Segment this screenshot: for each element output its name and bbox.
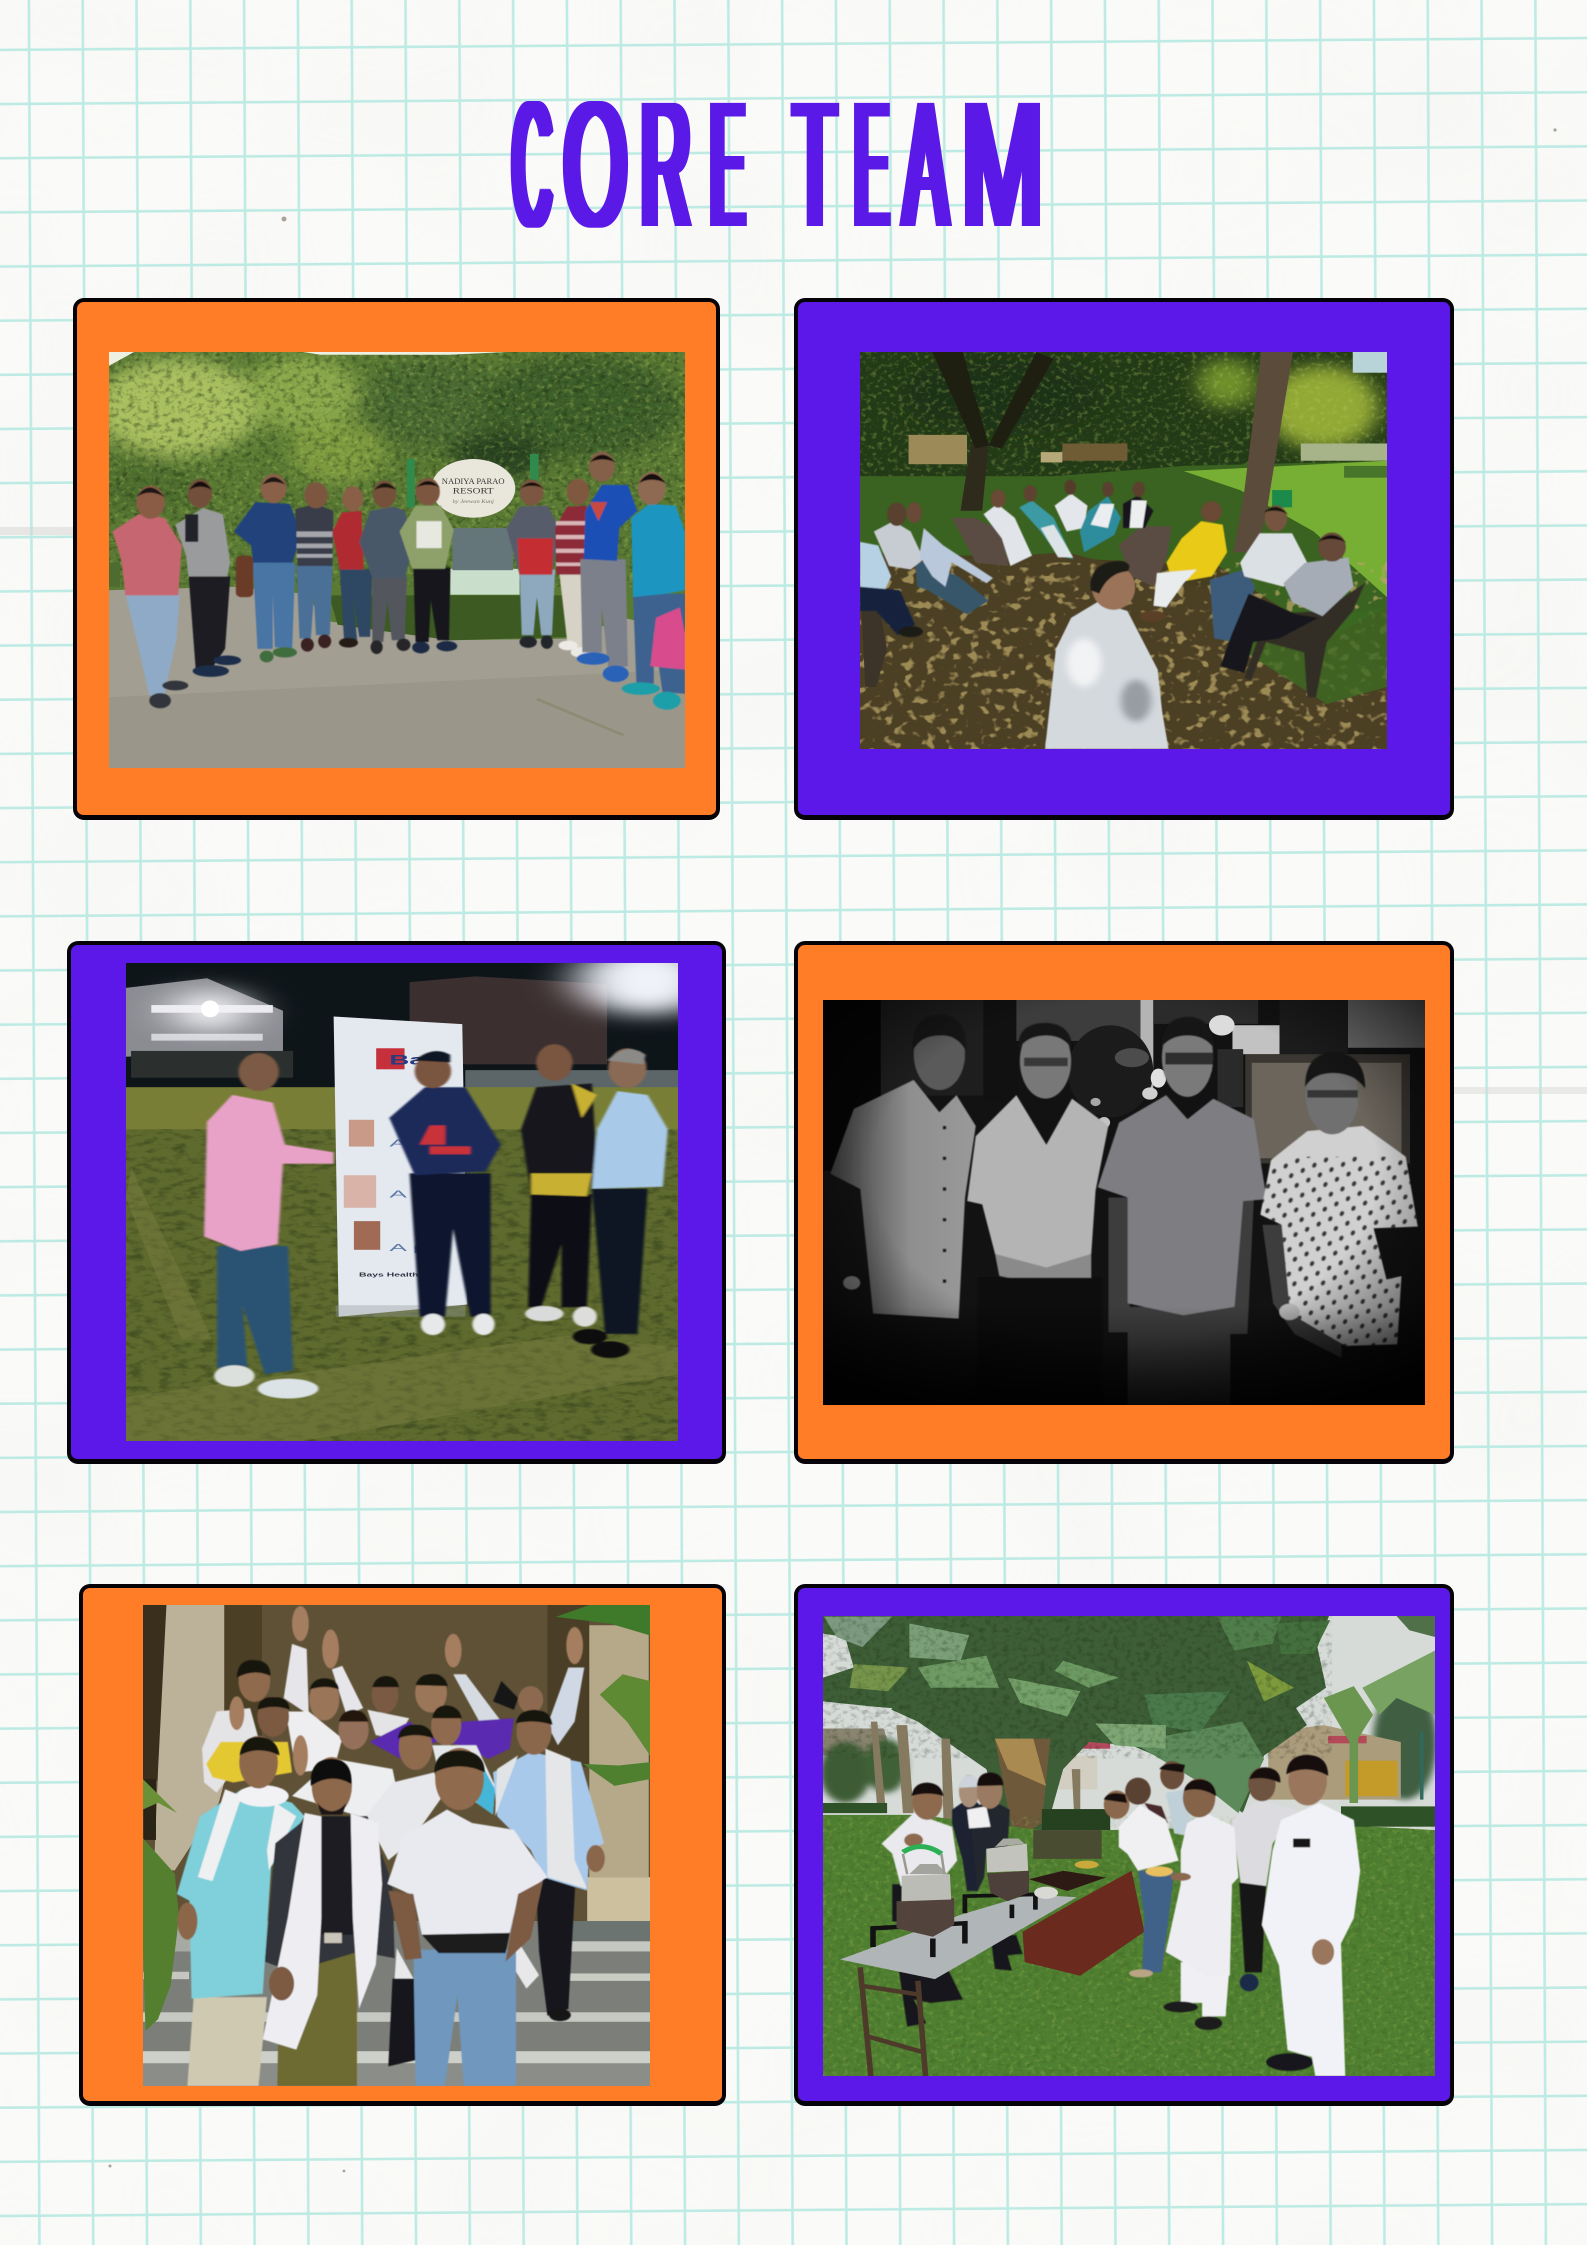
people group: [204, 1044, 668, 1399]
hedges: [823, 1803, 1435, 1859]
title: C: [513, 64, 551, 264]
building: [1059, 1725, 1401, 1800]
people group: [860, 480, 1365, 749]
people group: [830, 1015, 1418, 1405]
table, kettles and stoves: [840, 1839, 1144, 2076]
panel: purple frame with seated circle photo: [794, 298, 1454, 820]
photo: team at Nadiya Parao resort sign: [109, 352, 685, 768]
panel: orange frame with black and white photo: [794, 941, 1454, 1464]
photo: large group on the steps: [143, 1605, 650, 2086]
sign: Nadiya Parao Resort: RESORT: [453, 486, 494, 496]
people in back rows: [202, 1606, 605, 2021]
distant buildings: [909, 435, 1127, 464]
title: R: [641, 64, 691, 264]
panel: orange frame with resort group photo: [73, 298, 720, 820]
banner: A p: [389, 1189, 427, 1200]
people in front row: [177, 1736, 547, 2086]
right side palms: [1324, 1616, 1435, 1803]
banner: Bay: [389, 1052, 441, 1067]
sign: Nadiya Parao Resort: NADIYA PARAO: [442, 477, 505, 487]
tree decoration with lights: [1068, 1025, 1166, 1128]
title: [510, 64, 1043, 264]
title: T: [794, 64, 835, 264]
sign wall and hedge: [329, 454, 576, 640]
sign: Nadiya Parao Resort: by Jeewan Kunj: [453, 500, 494, 505]
buildings: [126, 976, 607, 1078]
people behind table: [882, 1772, 1023, 2027]
banner: [334, 1017, 467, 1317]
chairs: [861, 518, 1172, 687]
title: M: [962, 64, 1043, 264]
panel: purple frame with night ground photo: [67, 941, 726, 1464]
photo: team at a tea stall on a lawn: [823, 1616, 1435, 2076]
title: O: [564, 64, 627, 264]
palm canopy: [823, 1616, 1332, 1840]
banner: A pa: [389, 1242, 443, 1253]
title: E: [855, 64, 888, 264]
panel: orange frame with victory group photo: [79, 1584, 726, 2106]
columns: [143, 1605, 650, 1921]
people group: [112, 451, 685, 710]
photo: four men in black and white: [823, 1000, 1425, 1405]
banner: A p: [389, 1138, 427, 1149]
panel: purple frame with tea stall photo: [794, 1584, 1454, 2106]
steps: [143, 1921, 650, 2086]
people in white: [1104, 1755, 1360, 2076]
palm fronds: [143, 1605, 650, 2031]
sign: Nadiya Parao Resort: [431, 459, 515, 518]
title: E: [711, 64, 744, 264]
banner: Bays Healthcare: [359, 1272, 440, 1278]
title: A: [904, 64, 947, 264]
photo: four men beside a banner on a floodlit ground: [126, 963, 678, 1441]
photo: team seated in a circle under trees: [860, 352, 1387, 749]
tree trunks: [932, 352, 1293, 552]
